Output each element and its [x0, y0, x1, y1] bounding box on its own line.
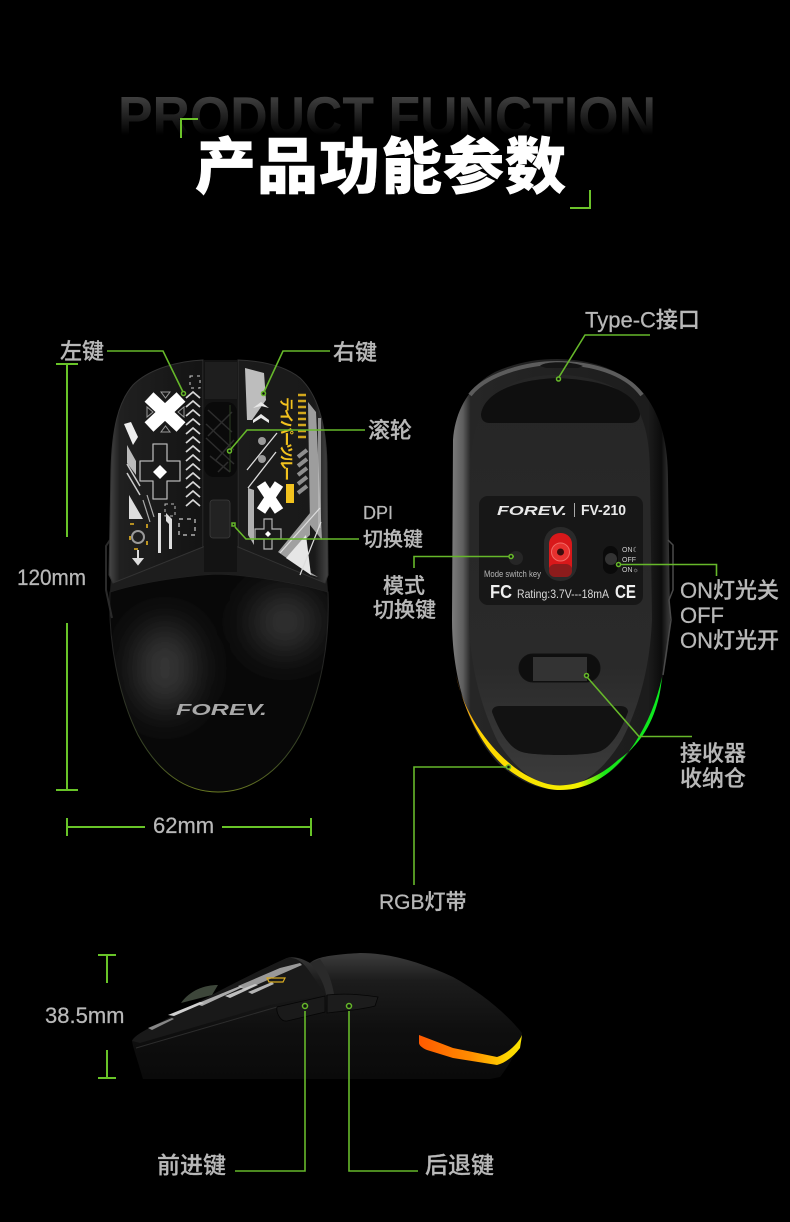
- outer shell: [452, 359, 670, 790]
- inner base: [469, 375, 652, 787]
- width value: 62mm: [153, 813, 214, 838]
- label: 后退键: [425, 1152, 494, 1178]
- top button graphics: [148, 963, 302, 1030]
- title block: [118, 85, 656, 208]
- main heading: 产品功能参数: [195, 133, 567, 201]
- front nose cover: [205, 362, 237, 399]
- callout: forward button: [157, 1004, 308, 1178]
- left button: [109, 360, 203, 583]
- right button graphics: テイパーツルー: [277, 397, 294, 481]
- top button surface: [132, 958, 325, 1043]
- rating text: Rating:3.7V---18mA: [517, 587, 609, 601]
- optical sensor: [544, 527, 577, 581]
- callout: scroll wheel: [228, 418, 412, 453]
- callout: left button: [60, 339, 186, 396]
- thickness value: 38.5mm: [45, 1003, 124, 1028]
- rgb light strip: [456, 675, 662, 790]
- label DPI: DPI: [363, 503, 393, 523]
- top foot pad: [481, 378, 640, 423]
- mode switch button: [509, 551, 523, 565]
- label plate: [479, 496, 643, 605]
- CE mark: CE: [615, 582, 636, 602]
- front band below buttons: [110, 546, 328, 592]
- label: 滚轮: [368, 418, 412, 443]
- DPI button: [210, 500, 230, 538]
- switch labels: ON☼: [622, 567, 639, 574]
- plate divider: [574, 503, 575, 517]
- corner bracket top left: [181, 119, 198, 138]
- callout: mode switch: [373, 554, 514, 622]
- label on off: ON灯光关: [680, 578, 779, 603]
- dimension: width 62mm: [67, 813, 311, 838]
- label switch key: 切换键: [373, 599, 436, 622]
- callout: light switch: [616, 562, 779, 653]
- callout: type-c port: [556, 308, 700, 381]
- scroll wheel bump: [181, 985, 218, 1003]
- hinge band: [310, 959, 334, 995]
- right button: [238, 360, 328, 583]
- right button graphics: [245, 368, 322, 577]
- switch labels: [622, 546, 639, 574]
- top rim highlight: [470, 363, 642, 395]
- label: Type-C接口: [585, 308, 700, 332]
- callout: rgb strip: [379, 765, 510, 914]
- callout: DPI switch: [232, 503, 423, 551]
- dimension: height 120mm: [17, 364, 86, 790]
- label: 左键: [60, 339, 104, 364]
- plate logo: FOREV.: [497, 503, 567, 518]
- label off: OFF: [680, 603, 724, 628]
- label storage: 收纳仓: [680, 766, 746, 791]
- receiver compartment: [519, 654, 600, 682]
- side light stripe: [419, 1035, 522, 1065]
- label receiver: 接收器: [680, 741, 746, 766]
- left button graphics: [124, 376, 200, 564]
- power switch: [603, 546, 618, 574]
- mode switch text: Mode switch key: [484, 569, 541, 580]
- label: RGB灯带: [379, 891, 467, 914]
- back button: [327, 994, 378, 1013]
- bottom foot pad: [492, 706, 628, 755]
- dimension: thickness 38.5mm: [45, 955, 124, 1078]
- label on: ON灯光开: [680, 628, 779, 653]
- label: 前进键: [157, 1152, 226, 1178]
- corner bracket bottom right: [570, 190, 590, 208]
- palm shell: [110, 574, 328, 792]
- callout: back button: [346, 1004, 494, 1178]
- scroll wheel: [204, 402, 237, 477]
- label switch key: 切换键: [363, 528, 423, 551]
- switch labels: OFF: [622, 557, 636, 564]
- ghost heading: PRODUCT FUNCTION: [118, 85, 656, 147]
- side view mouse: [132, 953, 522, 1079]
- label mode: 模式: [383, 575, 425, 598]
- forward button: [277, 996, 325, 1021]
- usb notch: [540, 362, 583, 368]
- side grip: [106, 540, 112, 618]
- height value: 120mm: [17, 565, 86, 590]
- label: 右键: [333, 340, 377, 365]
- side body: [132, 953, 522, 1079]
- center strip: [204, 360, 237, 572]
- brand logo on palm: FOREV.: [176, 702, 267, 719]
- FC mark: FC: [490, 582, 512, 602]
- bottom view mouse: [452, 359, 673, 790]
- right side button edge: [663, 540, 673, 675]
- top view mouse: [106, 360, 328, 792]
- callout: right button: [262, 340, 377, 396]
- callout: receiver storage: [584, 674, 746, 791]
- model number: FV-210: [581, 502, 626, 519]
- switch labels: ON☾: [622, 546, 639, 554]
- side seam: [136, 1007, 277, 1048]
